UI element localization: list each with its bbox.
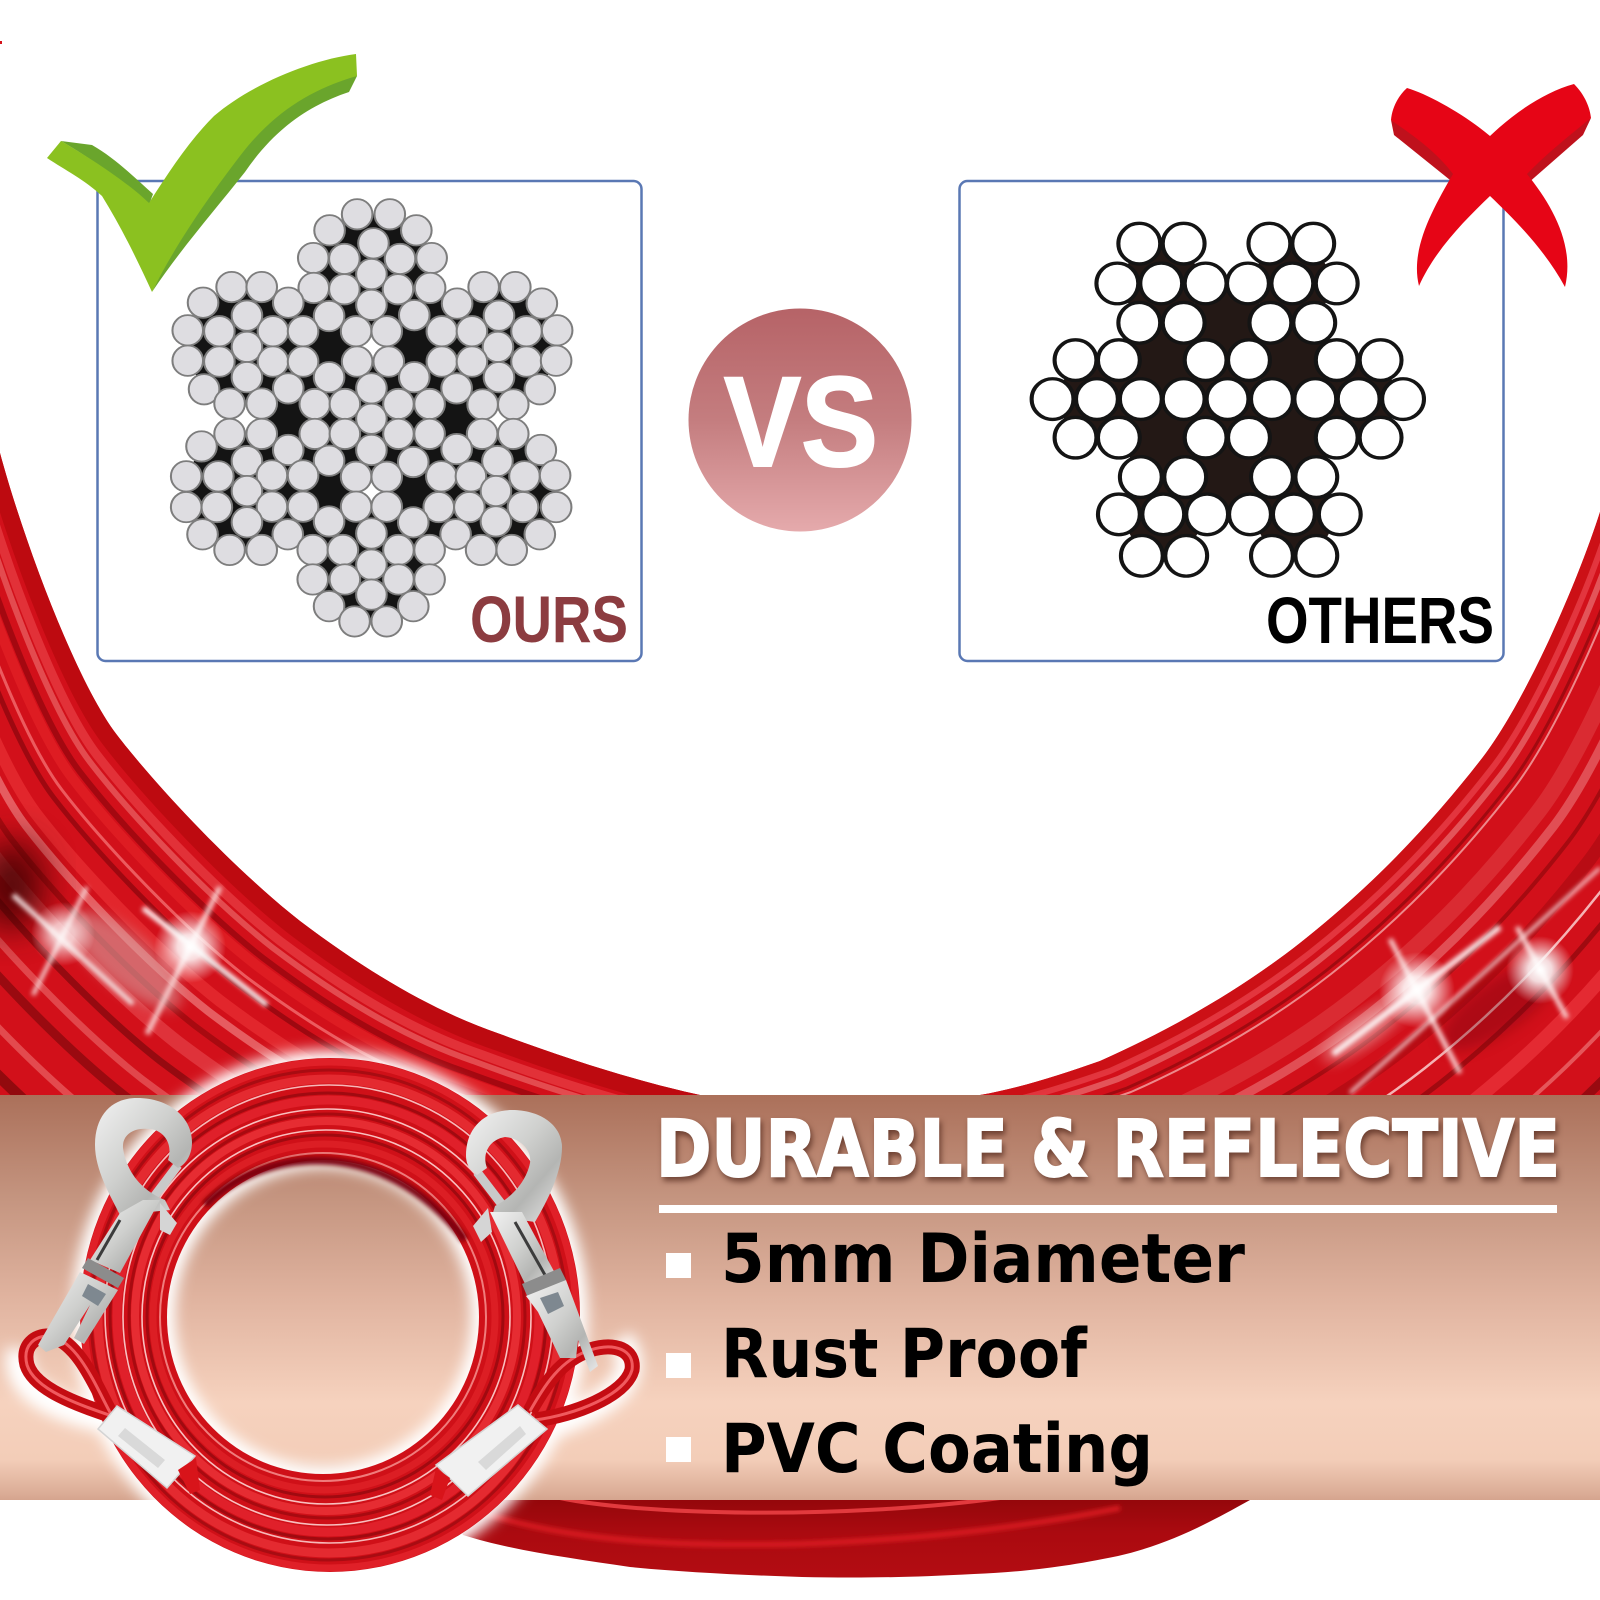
wire rope cross-section: ours <box>171 199 572 637</box>
coil glow <box>19 1050 629 1580</box>
label: ours: OURS <box>470 582 628 656</box>
product: red cable coil with snap hooks <box>19 1050 632 1580</box>
sparkle left 2 <box>143 887 267 1034</box>
icon: red cross mark <box>1391 84 1591 287</box>
cable loop: right <box>530 1347 632 1420</box>
panel border: ours <box>98 181 642 661</box>
vs badge <box>688 308 912 532</box>
red speck top left <box>0 41 2 44</box>
crimp: left <box>98 1406 200 1494</box>
others dark core <box>1053 244 1403 556</box>
label: others: OTHERS <box>1266 583 1494 657</box>
sparkle right 2 <box>1350 868 1600 1093</box>
feature list <box>666 1220 1245 1489</box>
feature: pvc coating: PVC Coating <box>721 1410 1153 1489</box>
snap hook: left <box>38 1098 192 1352</box>
icon: green check mark <box>47 54 357 292</box>
coil rings <box>80 1058 580 1572</box>
others wires <box>1032 223 1424 576</box>
red cable swoosh: left <box>0 453 700 1095</box>
cable loop: left <box>26 1336 112 1416</box>
rope dark core <box>186 214 557 621</box>
panel border: others <box>960 181 1504 661</box>
rope wires <box>171 199 572 637</box>
wire rope cross-section: others <box>1032 223 1424 576</box>
crimp: right <box>430 1405 547 1500</box>
banner panel <box>0 1095 1600 1500</box>
red cable swoosh: right <box>980 512 1600 1095</box>
panel: ours <box>98 181 642 661</box>
feature: 5mm diameter: 5mm Diameter <box>721 1220 1245 1299</box>
bullet 3 <box>666 1437 691 1462</box>
vs badge: VS <box>724 351 878 494</box>
divider rule <box>659 1205 1557 1213</box>
red cable band below banner <box>440 1490 1270 1578</box>
snap hook: right <box>466 1110 598 1372</box>
panel: others <box>960 181 1504 661</box>
sparkle left 1 <box>13 887 133 1004</box>
bullet 2 <box>666 1353 691 1378</box>
bullet 1 <box>666 1253 691 1278</box>
feature: rust proof: Rust Proof <box>721 1315 1088 1394</box>
sparkle right 1 <box>1333 927 1500 1073</box>
